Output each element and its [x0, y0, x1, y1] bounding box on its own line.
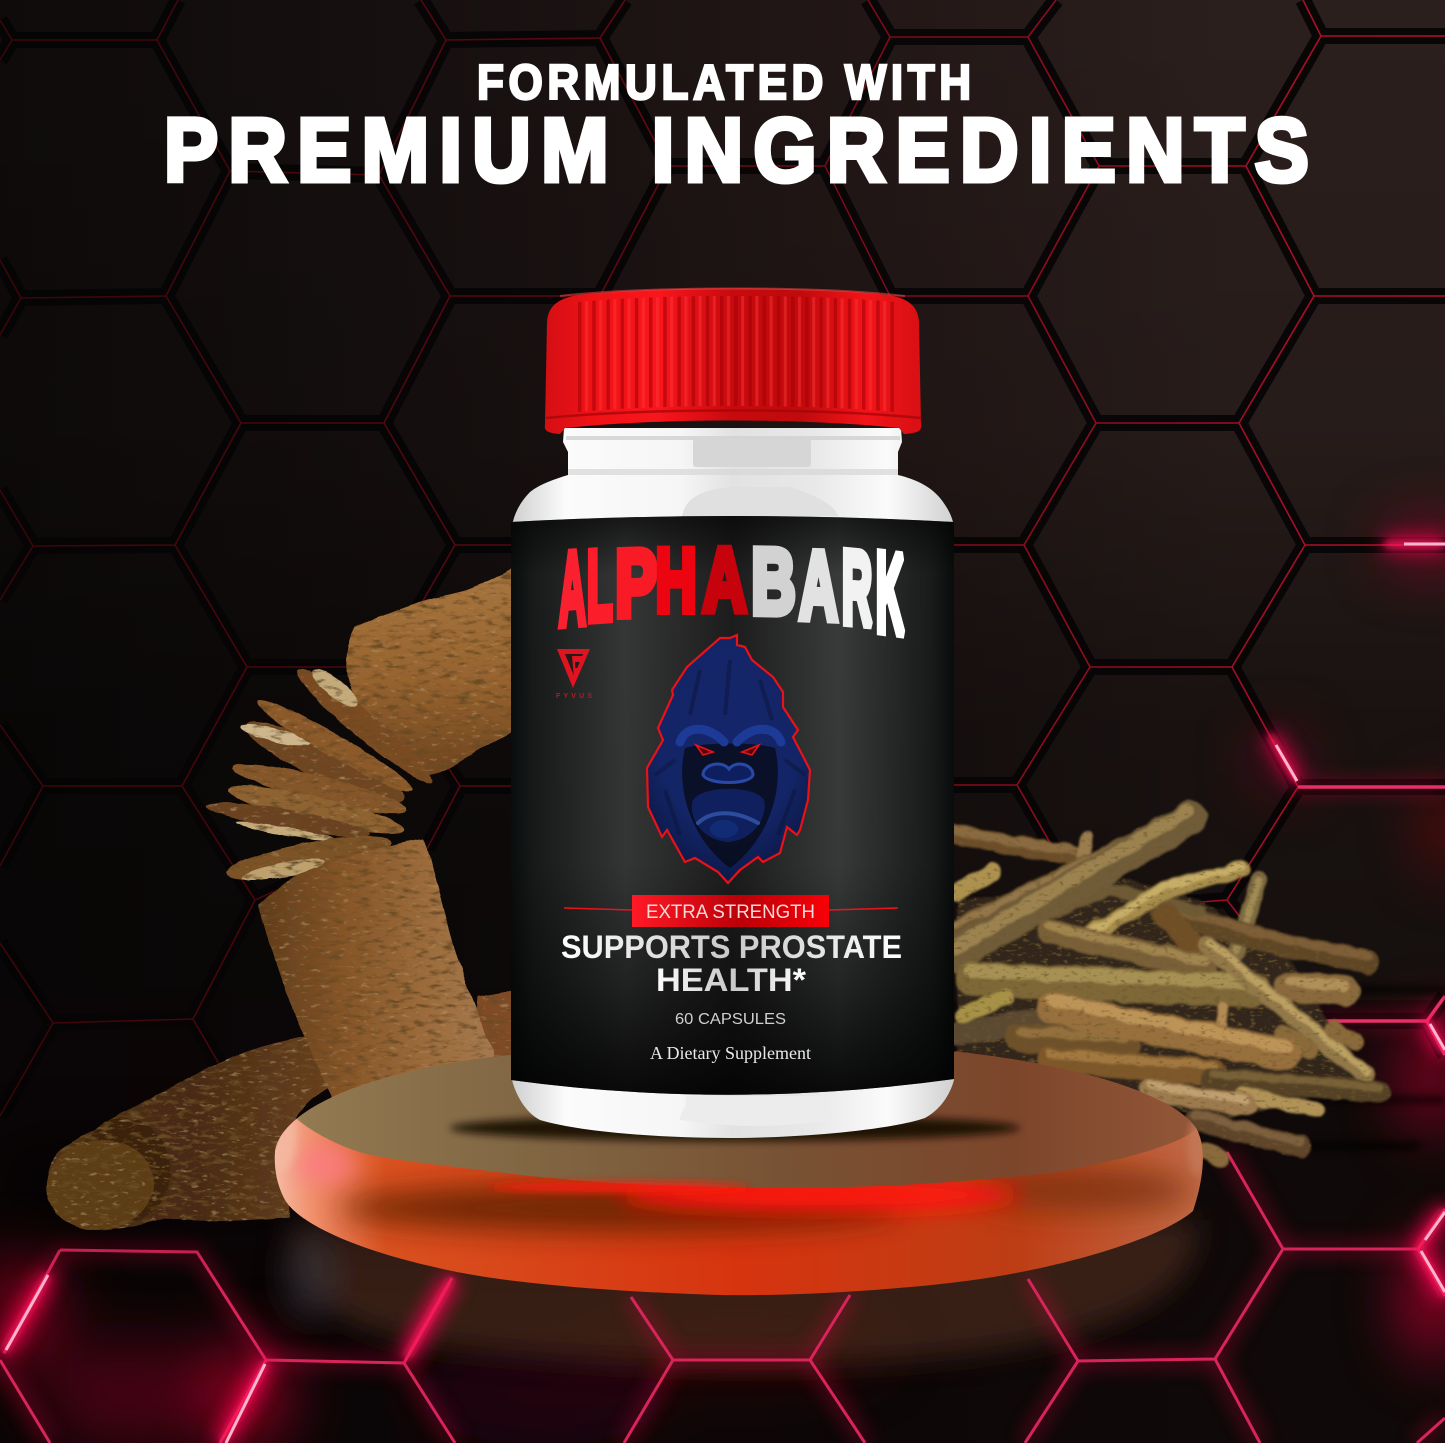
shadow: dark floor band	[0, 986, 1445, 1230]
brand name: alphabark: A	[703, 531, 746, 631]
extra strength banner	[564, 895, 898, 927]
fyvus logo: FYVUS	[556, 693, 592, 700]
title line: formulated with: FORMULATED WITH	[477, 55, 971, 110]
brand name: alphabark: H	[656, 531, 697, 630]
brand name: alphabark: K	[876, 529, 904, 658]
platform reflection	[282, 1220, 1198, 1365]
ingredient: ashwagandha root pile, right	[955, 812, 1380, 1158]
cap	[545, 288, 921, 434]
gorilla muzzle	[692, 789, 765, 842]
lower root cut end	[40, 1133, 160, 1237]
brand name: alphabark: A	[799, 533, 838, 641]
label	[511, 516, 954, 1095]
stump	[258, 839, 500, 1112]
title	[164, 55, 1309, 201]
gorilla mouth	[698, 813, 758, 823]
gorilla eyes	[696, 745, 759, 755]
claim text	[561, 929, 902, 998]
platform top surface	[275, 1046, 1196, 1188]
fyvus logo	[556, 649, 592, 700]
platform	[268, 1046, 1208, 1295]
claim text: SUPPORTS PROSTATE	[561, 929, 902, 965]
gorilla fur strokes	[655, 660, 805, 835]
root slices	[204, 659, 441, 889]
extra strength banner: EXTRA STRENGTH	[646, 901, 815, 923]
gorilla dark face shadow	[682, 744, 778, 868]
background: red glow pools	[0, 523, 1445, 1443]
brand name: alphabark: R	[842, 529, 872, 647]
background: hexagon grooves	[0, 0, 1445, 1116]
claim text: HEALTH*	[656, 962, 807, 998]
bottle shadow on platform	[450, 1115, 1020, 1141]
brand name: alphabark: P	[615, 530, 657, 636]
capsule count: 60 CAPSULES	[675, 1011, 786, 1028]
brand name: alphabark: A	[559, 531, 586, 648]
gorilla nose	[703, 764, 753, 782]
brand name: alphabark: L	[587, 530, 612, 643]
background: faint red hexagon lines	[0, 0, 1445, 1116]
platform side	[275, 1046, 1203, 1295]
product bottle	[511, 288, 954, 1138]
lower root	[47, 990, 516, 1230]
ingredient: cassava root, left	[40, 566, 516, 1237]
upper root chunk	[346, 566, 516, 774]
dietary supplement note: A Dietary Supplement	[650, 1043, 811, 1063]
title line: premium ingredients: PREMIUM INGREDIENTS	[164, 100, 1309, 201]
bottle body	[512, 428, 954, 1138]
background: pink neon lower hexagons	[0, 544, 1445, 1443]
brand name: alphabark	[559, 529, 904, 658]
gorilla head mascot	[647, 635, 810, 883]
brand name: alphabark: B	[752, 529, 796, 634]
bottle neck shading	[566, 436, 900, 1126]
gorilla brow	[680, 729, 781, 742]
